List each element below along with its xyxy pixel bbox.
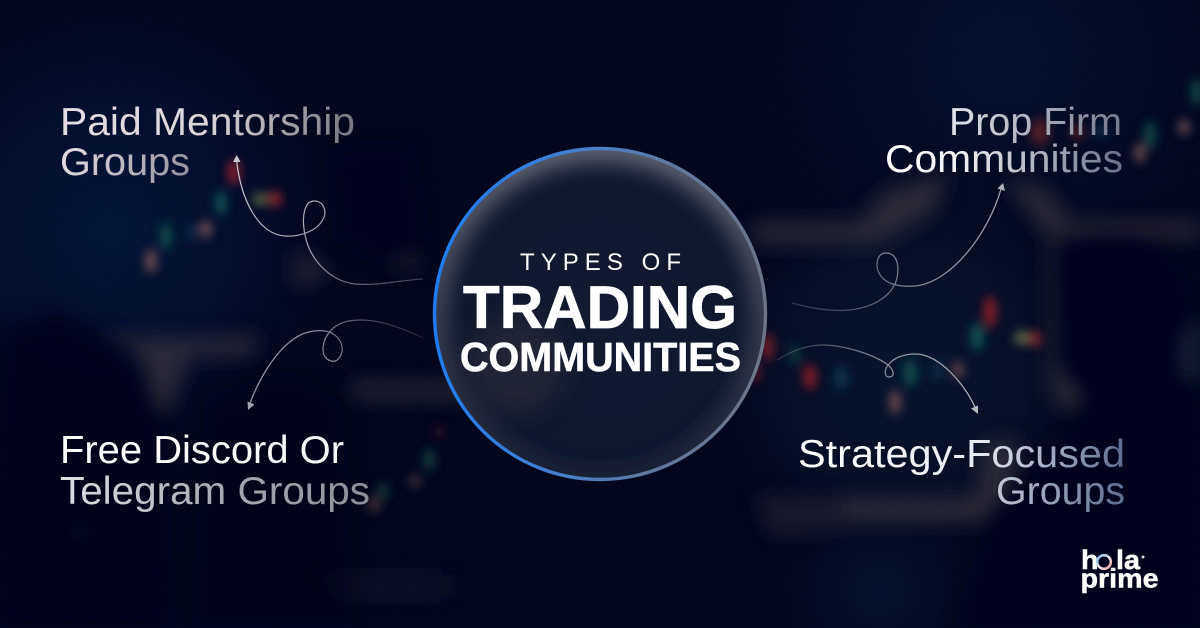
label: Strategy-Focused Groups: Groups bbox=[996, 470, 1125, 513]
label: Paid Mentorship Groups: Groups bbox=[60, 141, 190, 184]
label: Free Discord Or Telegram Groups: Telegram Groups bbox=[60, 470, 370, 513]
circle gradient ring bbox=[434, 148, 766, 480]
label: Free Discord Or Telegram Groups: Free Discord Or bbox=[60, 429, 344, 472]
label: Prop Firm Communities: Prop Firm bbox=[949, 101, 1122, 144]
background: blurred candlesticks bbox=[70, 78, 1200, 542]
background: dark silhouettes bbox=[0, 145, 1200, 628]
logo: hola prime bbox=[1080, 545, 1158, 594]
label: Prop Firm Communities: Communities bbox=[885, 138, 1123, 181]
logo ring letter o bbox=[1097, 555, 1111, 569]
arrow: to Prop Firm bbox=[792, 183, 1005, 311]
circle disc fill bbox=[434, 148, 766, 480]
central circle badge bbox=[434, 148, 766, 480]
arrow: to Strategy-Focused bbox=[777, 345, 978, 414]
label: Paid Mentorship Groups: Paid Mentorship bbox=[60, 101, 355, 144]
label: Free Discord Or Telegram Groups bbox=[60, 429, 370, 513]
title: COMMUNITIES bbox=[460, 334, 741, 380]
arrow: to Paid Mentorship bbox=[233, 155, 423, 284]
label: Prop Firm Communities bbox=[885, 101, 1123, 181]
logo: hola prime: prime bbox=[1080, 564, 1158, 594]
label: Strategy-Focused Groups bbox=[798, 433, 1125, 513]
label: Strategy-Focused Groups: Strategy-Focused bbox=[798, 433, 1125, 476]
background: desk and monitor highlights bbox=[96, 172, 1200, 597]
title: TRADING bbox=[463, 274, 737, 341]
arrow: to Free Discord bbox=[248, 320, 423, 410]
logo: hola prime: hola bbox=[1081, 545, 1141, 575]
label: Paid Mentorship Groups bbox=[60, 101, 355, 184]
title bbox=[460, 249, 741, 380]
circle inner glow bbox=[436, 150, 764, 442]
title: TYPES OF bbox=[520, 249, 681, 276]
logo registered dot bbox=[1142, 556, 1144, 558]
